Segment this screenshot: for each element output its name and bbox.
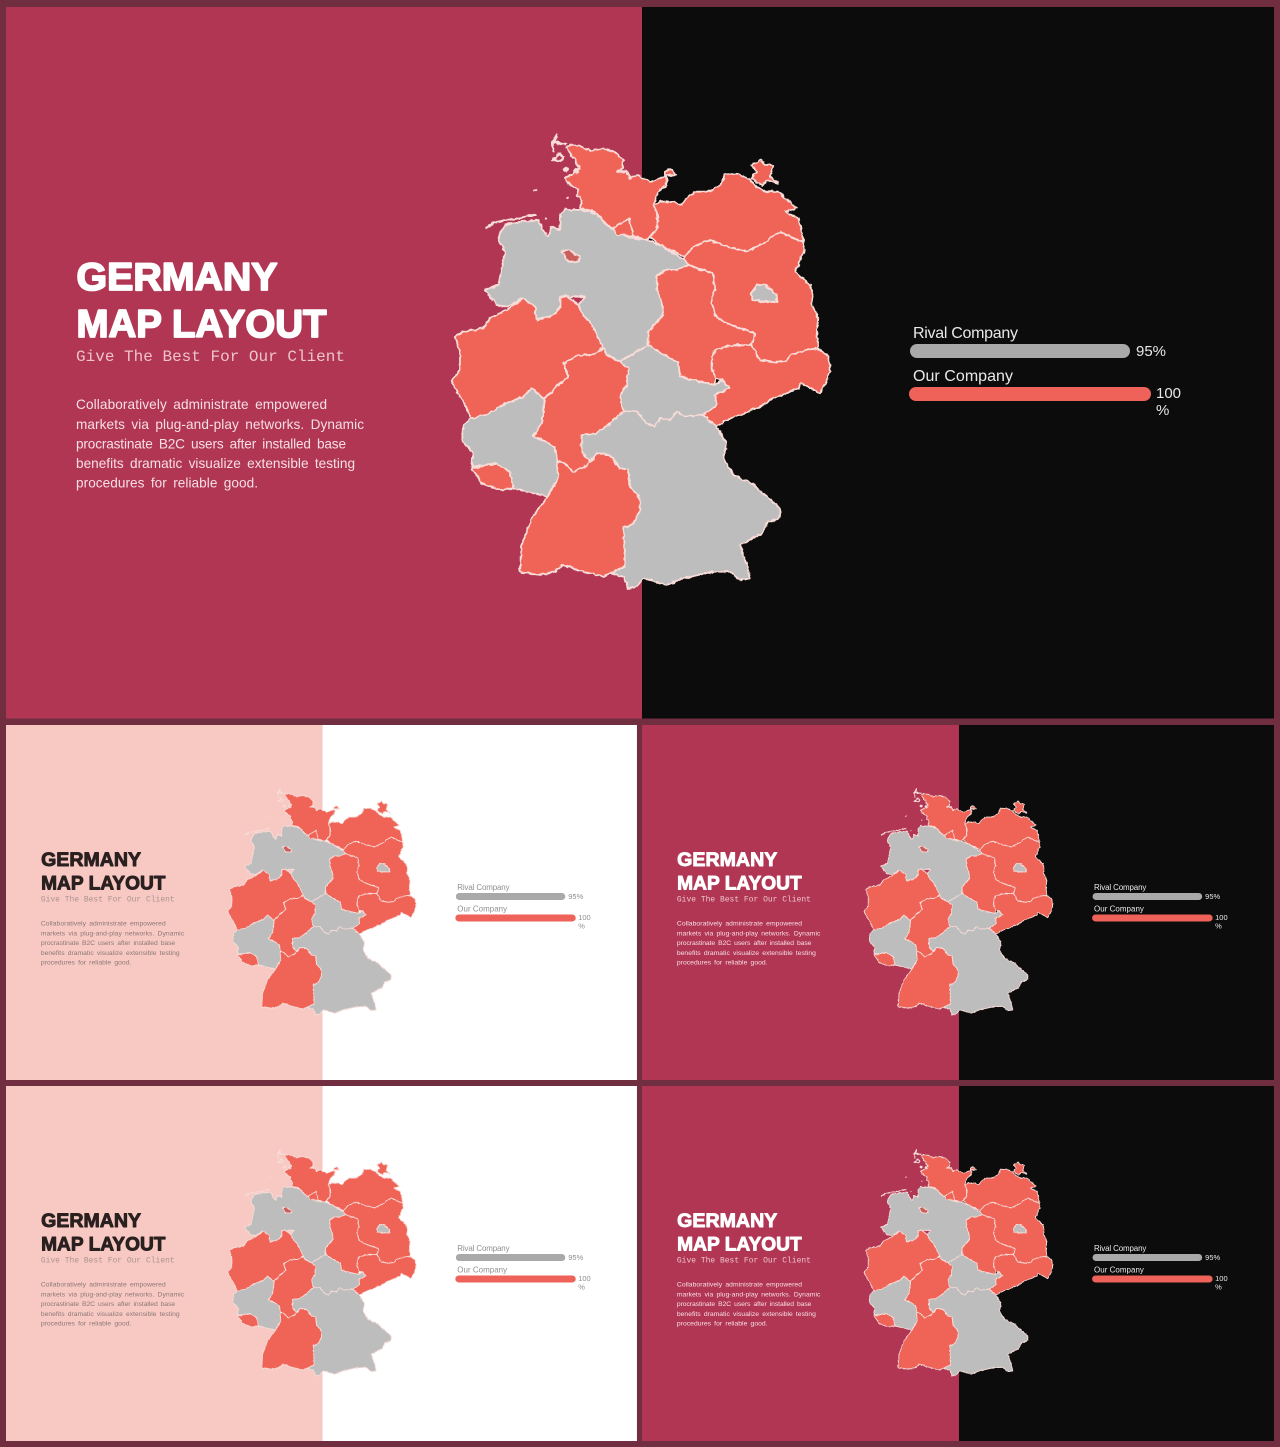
title	[677, 849, 802, 895]
comparison bars: 95%	[1205, 1253, 1220, 1262]
state: Thuringia	[620, 345, 730, 427]
comparison bars: 95%	[1136, 343, 1166, 360]
panel: small dark slide, bottom right	[642, 1086, 1274, 1441]
panel: small light slide, bottom left	[6, 1086, 637, 1441]
comparison bars: 95%	[568, 892, 584, 901]
comparison bars	[455, 883, 591, 930]
state: Bavaria	[582, 412, 780, 588]
title: MAP LAYOUT	[677, 1234, 802, 1256]
body text: benefits dramatic visualize extensible testing	[677, 1311, 816, 1318]
body text: procrastinate B2C users after installed base	[677, 1301, 812, 1308]
body text: markets via plug-and-play networks. Dynamic	[41, 1291, 185, 1298]
body text: Collaboratively administrate empowered	[41, 1281, 166, 1288]
comparison bars: 100	[578, 913, 591, 922]
map of Germany	[864, 789, 1053, 1015]
body text	[76, 397, 364, 490]
subtitle: Give The Best For Our Client	[677, 1257, 811, 1266]
state: Schleswig-Holstein	[565, 145, 677, 240]
body text: procedures for reliable good.	[677, 960, 768, 967]
body text: procedures for reliable good.	[76, 476, 258, 490]
body text: procedures for reliable good.	[677, 1321, 768, 1328]
title	[41, 1210, 166, 1256]
subtitle: Give The Best For Our Client	[677, 896, 811, 905]
state: Brandenburg	[685, 232, 818, 362]
body text: Collaboratively administrate empowered	[76, 397, 327, 412]
title	[41, 849, 166, 895]
state: Hamburg	[613, 219, 633, 237]
panel: small dark slide, top right	[642, 725, 1274, 1080]
comparison bars: 100	[578, 1274, 591, 1283]
coastal islands	[487, 135, 577, 227]
title: MAP LAYOUT	[677, 873, 802, 895]
comparison bars	[909, 325, 1181, 419]
comparison bars: Rival Company	[1094, 1244, 1146, 1253]
body text: procedures for reliable good.	[41, 960, 132, 967]
state: Saxony-Anhalt	[648, 265, 755, 385]
city: Berlin	[752, 285, 777, 302]
subtitle: Give The Best For Our Client	[41, 1256, 175, 1266]
body text: markets via plug-and-play networks. Dynamic	[677, 1291, 821, 1298]
panel: large dark slide	[6, 7, 1274, 718]
body text: procedures for reliable good.	[41, 1321, 132, 1328]
map of Germany	[864, 1150, 1053, 1376]
title: GERMANY	[677, 849, 777, 871]
body text: markets via plug-and-play networks. Dynamic	[76, 417, 364, 432]
panel: small light slide, top left	[6, 725, 637, 1080]
title: GERMANY	[76, 256, 278, 299]
body text: procrastinate B2C users after installed base	[41, 940, 175, 947]
title: GERMANY	[677, 1210, 777, 1232]
state: Baden-Wuerttemberg	[520, 453, 640, 577]
body text	[41, 920, 185, 967]
body text: markets via plug-and-play networks. Dynamic	[677, 930, 821, 937]
title: MAP LAYOUT	[76, 303, 327, 346]
state: Lower Saxony	[485, 209, 688, 362]
comparison bars: %	[1215, 921, 1222, 930]
state: Mecklenburg-Vorpommern	[650, 174, 803, 257]
subtitle: Give The Best For Our Client	[76, 348, 345, 366]
map of Germany	[228, 1150, 416, 1376]
island: Ruegen	[752, 160, 778, 186]
comparison bars: %	[578, 921, 585, 930]
state: Saxony	[703, 345, 830, 427]
title: GERMANY	[41, 849, 141, 871]
state: North Rhine-Westphalia	[452, 297, 603, 418]
comparison bars: %	[578, 1282, 585, 1291]
body text: procrastinate B2C users after installed base	[677, 940, 812, 947]
comparison bars: Our Company	[1094, 904, 1144, 913]
comparison bars: Rival Company	[457, 883, 510, 892]
comparison bars: 100	[1215, 1274, 1228, 1283]
comparison bars: %	[1156, 402, 1169, 419]
body text: markets via plug-and-play networks. Dynamic	[41, 930, 185, 937]
comparison bars: Our Company	[1094, 1265, 1144, 1274]
map of Germany	[452, 135, 830, 588]
comparison bars: 95%	[1205, 892, 1220, 901]
title	[677, 1210, 802, 1256]
state: Hesse	[533, 348, 628, 472]
comparison bars: 100	[1215, 913, 1228, 922]
body text: Collaboratively administrate empowered	[677, 920, 802, 927]
body text: benefits dramatic visualize extensible testing	[41, 1311, 180, 1318]
map of Germany	[228, 789, 416, 1015]
comparison bars	[1092, 1244, 1228, 1291]
body text: Collaboratively administrate empowered	[677, 1281, 802, 1288]
title: MAP LAYOUT	[41, 1234, 166, 1256]
body text	[677, 1281, 821, 1328]
comparison bars: Our Company	[457, 904, 507, 913]
comparison bars: Our Company	[913, 368, 1013, 385]
comparison bars: Rival Company	[457, 1244, 510, 1253]
body text: procrastinate B2C users after installed base	[41, 1301, 175, 1308]
title	[76, 256, 327, 346]
state: Bremen	[562, 250, 580, 262]
body text: benefits dramatic visualize extensible testing	[41, 950, 180, 957]
body text: benefits dramatic visualize extensible testing	[677, 950, 816, 957]
title: GERMANY	[41, 1210, 141, 1232]
comparison bars: 95%	[568, 1253, 584, 1262]
comparison bars	[1092, 883, 1228, 930]
comparison bars	[455, 1244, 591, 1291]
comparison bars: Rival Company	[1094, 883, 1146, 892]
subtitle: Give The Best For Our Client	[41, 895, 175, 905]
comparison bars: Rival Company	[913, 325, 1018, 342]
body text: Collaboratively administrate empowered	[41, 920, 166, 927]
state: Rhineland-Palatinate	[462, 388, 558, 497]
comparison bars: 100	[1156, 385, 1181, 402]
body text	[677, 920, 821, 967]
title: MAP LAYOUT	[41, 873, 166, 895]
body text: benefits dramatic visualize extensible testing	[76, 456, 355, 471]
comparison bars: %	[1215, 1282, 1222, 1291]
comparison bars: Our Company	[457, 1265, 507, 1274]
body text: procrastinate B2C users after installed base	[76, 436, 346, 452]
body text	[41, 1281, 185, 1328]
state: Saarland	[472, 463, 513, 490]
